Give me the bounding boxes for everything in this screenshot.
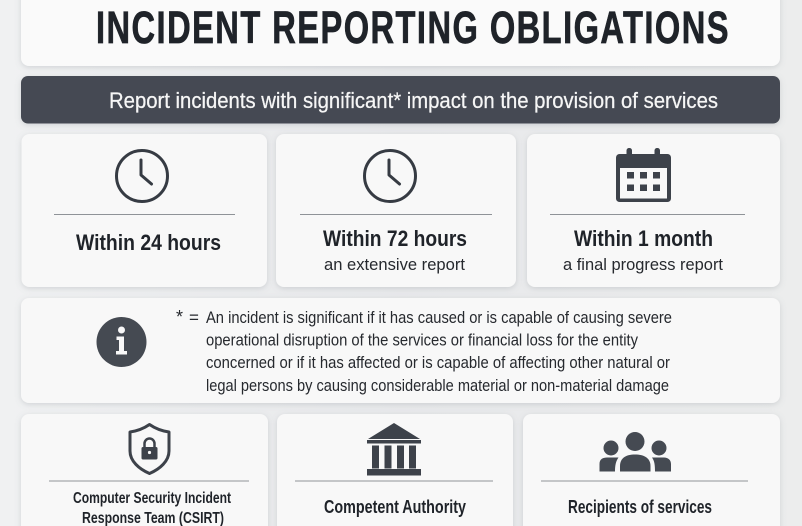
definition text: =	[189, 308, 199, 327]
panel: within 24 hours	[22, 134, 267, 287]
panel: within 1 month: Within 1 month	[574, 226, 713, 251]
panel: recipients of services: Recipients of services	[568, 497, 712, 517]
panel: recipients of services	[523, 414, 780, 526]
definition text: An incident is significant if it has caused or is capable of causing severe	[206, 308, 672, 327]
panel: competent authority: Competent Authority	[324, 497, 466, 517]
banner	[21, 76, 780, 124]
banner: Report incidents with significant* impact on the provision of services	[109, 88, 718, 113]
title panel	[21, 0, 780, 66]
panel: competent authority	[277, 414, 513, 526]
definition text: operational disruption of the services or financial loss for the entity	[206, 330, 638, 350]
panel: within 72 hours: an extensive report	[324, 255, 465, 274]
icon: info	[96, 317, 146, 367]
icon: building	[367, 423, 421, 476]
definition text: *	[176, 307, 183, 327]
panel: within 72 hours	[276, 134, 516, 287]
icon: shield with lock	[130, 424, 169, 474]
panel: CSIRT: Computer Security Incident	[73, 490, 232, 507]
panel: within 1 month	[527, 134, 780, 287]
panel: within 24 hours: Within 24 hours	[76, 230, 221, 255]
icon: clock	[364, 150, 416, 202]
icon: people	[600, 432, 671, 472]
icon: calendar	[616, 148, 671, 202]
panel: CSIRT	[21, 414, 268, 526]
panel: significant incident definition	[21, 298, 780, 403]
definition text: legal persons by causing considerable material or non-material damage	[206, 376, 669, 395]
panel: within 1 month: a final progress report	[563, 255, 723, 274]
panel: within 72 hours: Within 72 hours	[323, 226, 467, 251]
definition text	[176, 307, 672, 395]
icon: clock	[116, 150, 168, 202]
definition text: concerned or if it has affected or is capable of affecting other natural or	[206, 353, 670, 372]
